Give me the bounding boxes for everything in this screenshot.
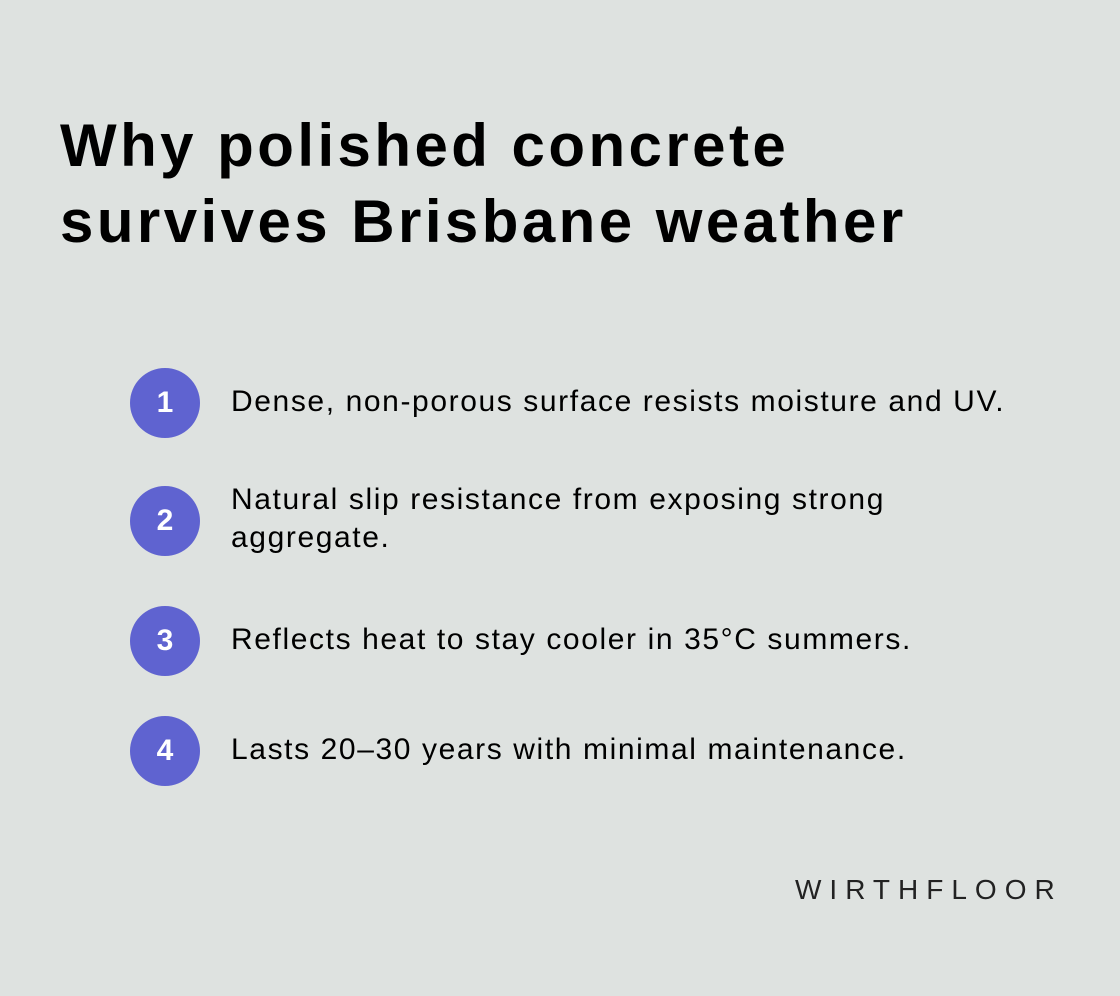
- title: Why polished concrete: [60, 112, 789, 179]
- text 2: Natural slip resistance from exposing strong: [231, 483, 885, 516]
- badge 3: [130, 606, 200, 676]
- badge 2: 2: [157, 504, 173, 537]
- text 2: [231, 483, 885, 554]
- badge 4: 4: [157, 734, 173, 767]
- logo: WIRTHFLOOR: [795, 874, 1063, 905]
- badge 1: [130, 368, 200, 438]
- badge 1: 1: [157, 386, 173, 419]
- text 2: aggregate.: [231, 521, 390, 554]
- badge 3: 3: [157, 624, 173, 657]
- text 4: Lasts 20–30 years with minimal maintenance.: [231, 733, 907, 766]
- text 1: Dense, non-porous surface resists moisture and UV.: [231, 385, 1005, 418]
- badge 2: [130, 486, 200, 556]
- text 3: Reflects heat to stay cooler in 35°C summers.: [231, 623, 912, 656]
- title: survives Brisbane weather: [60, 188, 907, 255]
- title: [60, 112, 907, 255]
- badge 4: [130, 716, 200, 786]
